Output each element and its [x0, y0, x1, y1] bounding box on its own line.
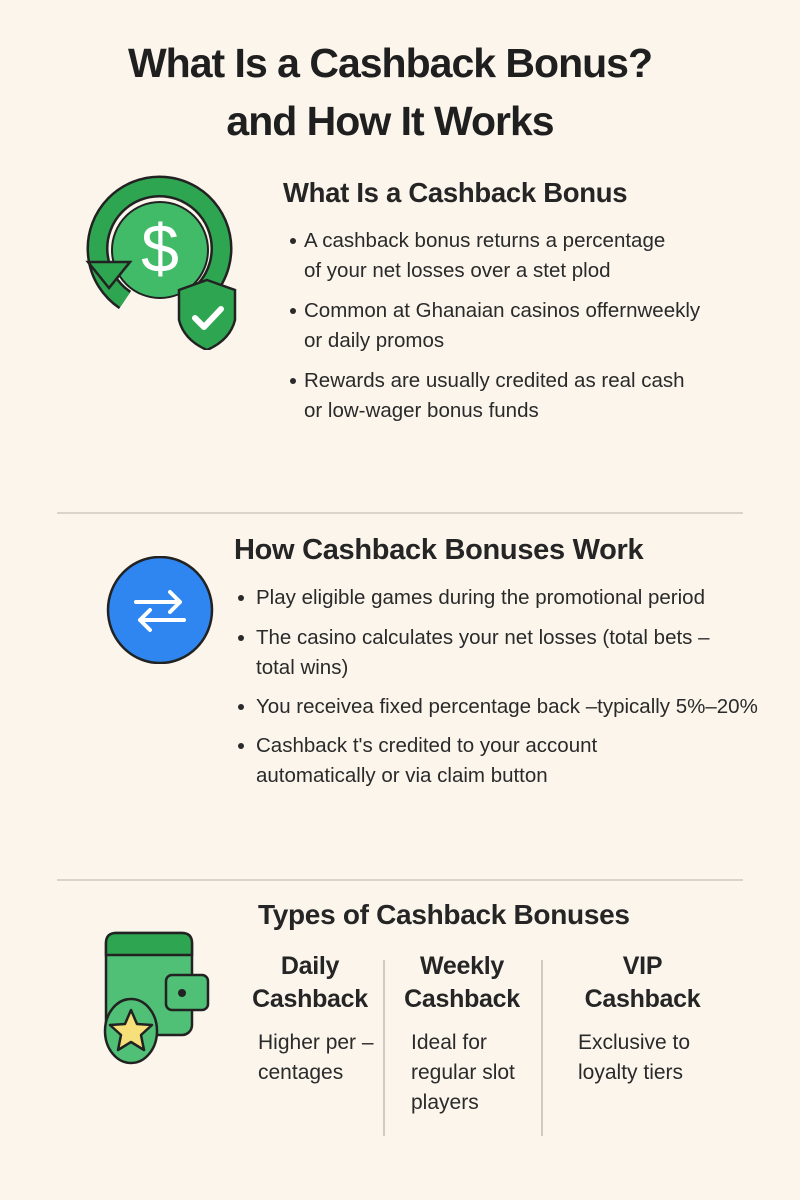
bullets: what is: or daily promos: [304, 329, 444, 352]
bullets: what is: Common at Ghanaian casinos offernweekly: [304, 299, 700, 322]
column: weekly: players: [411, 1091, 479, 1114]
column: vip: VIP: [623, 952, 662, 980]
bullets: what is: [290, 229, 700, 422]
bullets: what is: of your net losses over a stet plod: [304, 259, 611, 282]
bullets: how it works: Cashback t's credited to your account: [256, 734, 597, 757]
bullets: how it works: total wins): [256, 656, 348, 679]
column: weekly: [404, 952, 520, 1114]
title: What Is a Cashback Bonus?: [128, 40, 652, 86]
column: daily: centages: [258, 1061, 343, 1084]
bullets: how it works: You receivea fixed percentage back –typically 5%–20%: [256, 695, 758, 718]
column: vip: [578, 952, 701, 1084]
column: vip: Exclusive to: [578, 1031, 690, 1054]
title: and How It Works: [226, 98, 554, 144]
bullets: what is: Rewards are usually credited as real cash: [304, 369, 685, 392]
column: daily: Daily: [281, 952, 339, 980]
bullets: how it works: automatically or via claim button: [256, 764, 548, 787]
bullets: how it works: Play eligible games during the promotional period: [256, 586, 705, 609]
heading: types: Types of Cashback Bonuses: [258, 899, 630, 930]
bullets: how it works: [238, 586, 758, 787]
bullets: what is: or low-wager bonus funds: [304, 399, 539, 422]
icon: cashback coin with shield: [86, 176, 236, 350]
column: vip: Cashback: [585, 985, 700, 1013]
column: daily: Cashback: [252, 985, 368, 1013]
bullets: what is: A cashback bonus returns a percentage: [304, 229, 665, 252]
column: weekly: Ideal for: [411, 1031, 487, 1054]
bullets: how it works: The casino calculates your net losses (total bets –: [256, 626, 710, 649]
icon: blue exchange arrows: [106, 556, 214, 664]
icon: cashback coin with shield: $: [141, 211, 179, 287]
column: weekly: Cashback: [404, 985, 520, 1013]
heading: what is: What Is a Cashback Bonus: [283, 177, 627, 208]
icon: wallet with star: [104, 932, 210, 1064]
column: vip: loyalty tiers: [578, 1061, 683, 1084]
title: [128, 40, 652, 144]
column: daily: Higher per –: [258, 1031, 374, 1054]
heading: how it works: How Cashback Bonuses Work: [234, 534, 643, 566]
column: daily: [252, 952, 374, 1084]
column: weekly: regular slot: [411, 1061, 515, 1084]
column: weekly: Weekly: [420, 952, 504, 980]
